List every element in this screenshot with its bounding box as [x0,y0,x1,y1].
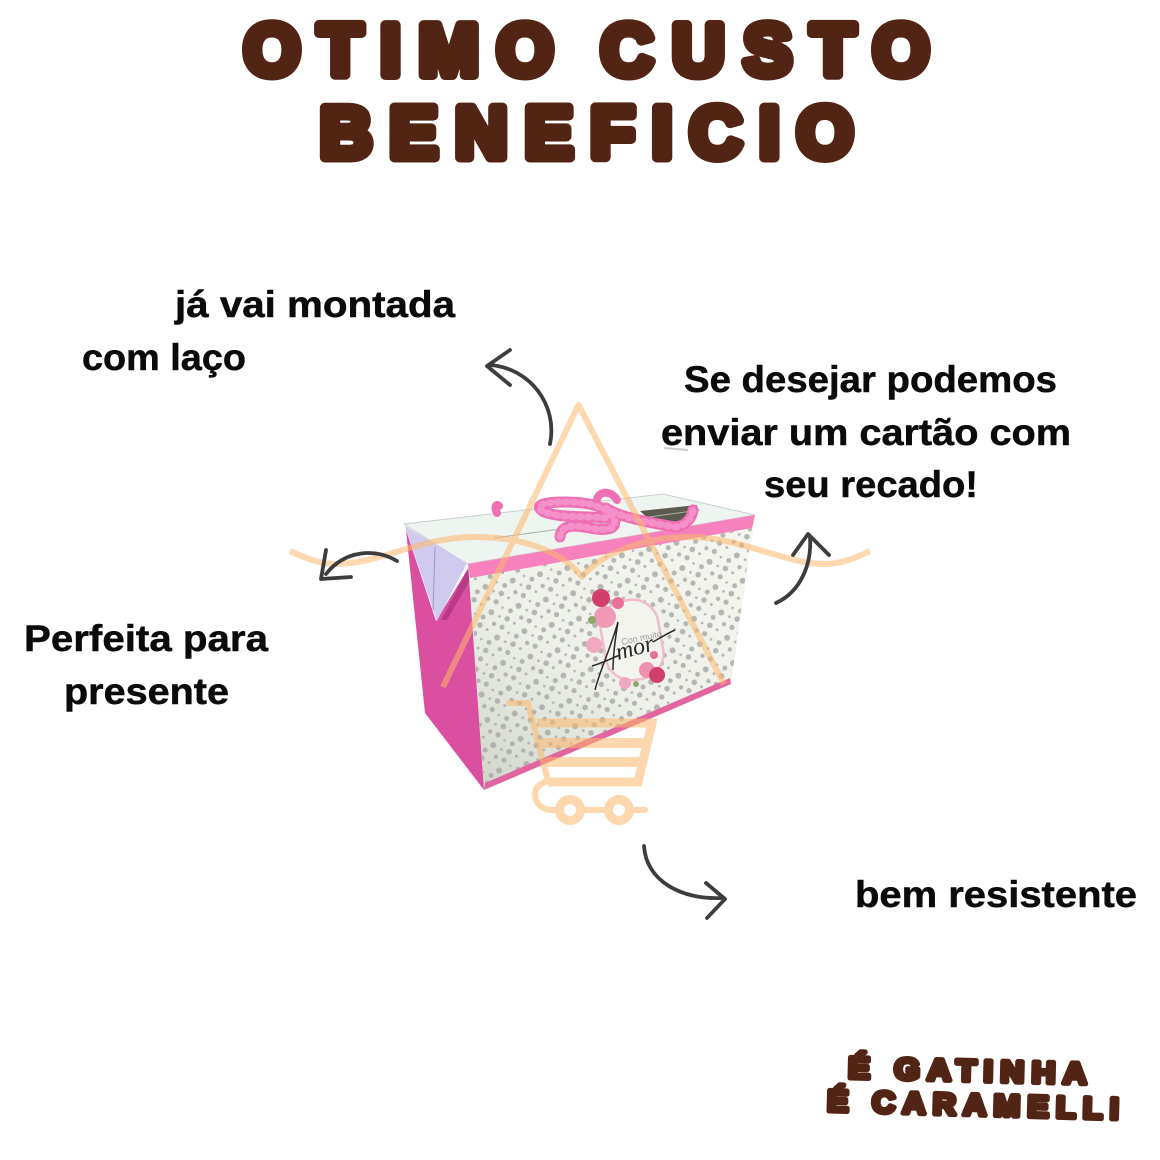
text: card message [661,359,1071,505]
title: OTIMO [244,11,553,91]
text: Perfeita para presente: Perfeita para [24,618,268,659]
floral wreath label: mor [613,631,658,666]
brand logo text [827,1051,1127,1126]
brand logo text: É CARAMELLI [827,1084,1127,1126]
watermark logo [290,405,870,820]
text: Perfeita para presente [24,618,268,712]
watermark wave [290,537,870,577]
text: card message: seu recado! [764,464,978,505]
watermark triangle [443,405,724,687]
arrow: down-right to "bem resistente" [644,846,725,918]
title [244,11,929,174]
box front face with floral pattern [468,515,755,790]
box top face [404,494,755,564]
arrow: left to "Perfeita para presente" [321,550,397,579]
rope handle [496,493,693,537]
floral wreath label [586,589,675,690]
text: card message: enviar um cartão com [661,412,1071,453]
arrow: up-left to "já vai montada" [487,350,551,444]
arrow: up-right to card message [776,534,829,603]
text: bem resistente: bem resistente [855,874,1137,915]
brand logo text: É GATINHA [848,1051,1095,1091]
text: já vai montada com laço: com laço [82,337,246,378]
box lavender corner flap [405,526,467,621]
text: card message: Se desejar podemos [684,359,1057,400]
box side panel [406,530,484,790]
watermark shopping cart [509,703,652,820]
title: BENEFICIO [320,94,853,174]
title: CUSTO [601,11,929,91]
text: Perfeita para presente: presente [64,671,229,712]
floral wreath label: Con muito [620,629,663,647]
text: já vai montada com laço: já vai montada [174,284,455,325]
product: pink gift box [404,493,755,790]
text: já vai montada com laço [82,284,455,378]
